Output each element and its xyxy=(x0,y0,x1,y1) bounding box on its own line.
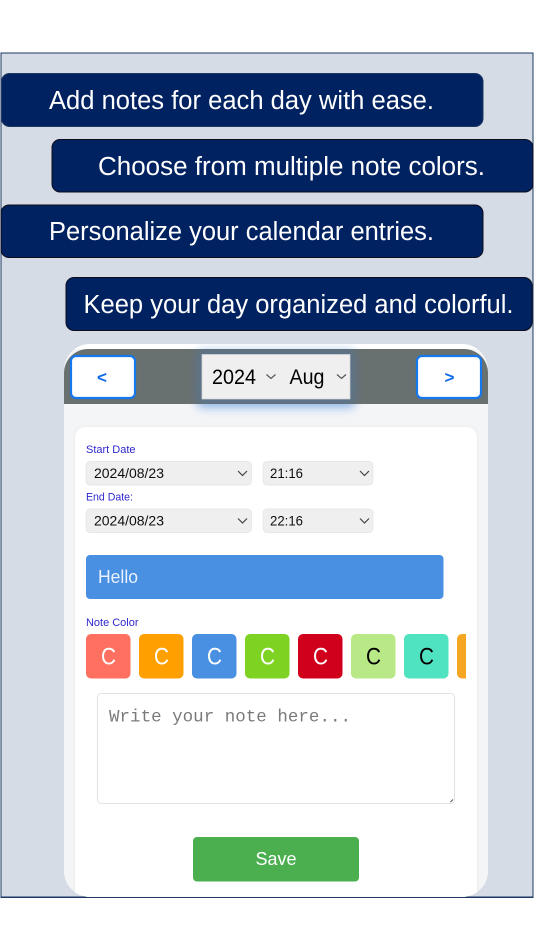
note text area xyxy=(98,694,454,804)
start time select xyxy=(263,462,373,485)
swatch: turquoise xyxy=(404,634,448,678)
swatch: orange xyxy=(139,634,184,678)
swatch: green: C xyxy=(260,644,275,670)
swatch: light green: C xyxy=(366,644,381,670)
end date label: End Date: xyxy=(86,492,133,504)
swatch: red: C xyxy=(313,644,328,670)
year and month selector xyxy=(202,354,350,399)
swatch: light green xyxy=(351,634,396,678)
feature pill: personalize xyxy=(1,205,483,258)
end date select xyxy=(86,509,252,532)
feature pill: organized: Keep your day organized and colorful. xyxy=(84,291,514,319)
note title input xyxy=(86,555,444,599)
note form card xyxy=(75,427,477,897)
end time select xyxy=(263,509,373,532)
note color label: Note Color xyxy=(86,617,139,629)
swatch: coral: C xyxy=(101,644,116,670)
swatch: red xyxy=(298,634,342,678)
swatch: coral xyxy=(86,634,130,678)
note text area: Write your note here... xyxy=(109,708,351,728)
note color swatches xyxy=(86,634,466,678)
swatch: amber, cut off xyxy=(457,634,466,678)
next month button: > xyxy=(445,368,455,387)
swatch: green xyxy=(245,634,290,678)
feature pill: organized xyxy=(66,278,532,330)
feature pill: add notes: Add notes for each day with ease. xyxy=(49,87,434,115)
previous month button xyxy=(71,356,135,398)
app header bar xyxy=(64,349,488,404)
swatch: blue: C xyxy=(207,644,222,670)
phone app screenshot xyxy=(64,344,488,917)
swatch: blue xyxy=(192,634,236,678)
start date select: 2024/08/23 xyxy=(94,465,164,481)
note title input: Hello xyxy=(98,567,138,587)
next month button xyxy=(417,356,481,398)
start time select: 21:16 xyxy=(270,465,303,481)
save button: Save xyxy=(255,849,297,869)
year and month selector: 2024 xyxy=(212,365,256,389)
swatch: turquoise: C xyxy=(419,644,434,670)
feature pill: note colors: Choose from multiple note colors. xyxy=(98,153,485,181)
year and month selector: Aug xyxy=(290,365,324,389)
start date select xyxy=(86,462,252,485)
swatch: orange: C xyxy=(154,644,169,670)
previous month button: < xyxy=(97,368,107,387)
save button xyxy=(193,837,359,882)
end time select: 22:16 xyxy=(270,512,303,528)
feature pill: note colors xyxy=(52,140,533,192)
feature pill: personalize: Personalize your calendar entries. xyxy=(49,218,434,246)
start date label: Start Date xyxy=(86,444,136,456)
end date select: 2024/08/23 xyxy=(94,512,164,528)
feature pill: add notes xyxy=(2,74,483,126)
